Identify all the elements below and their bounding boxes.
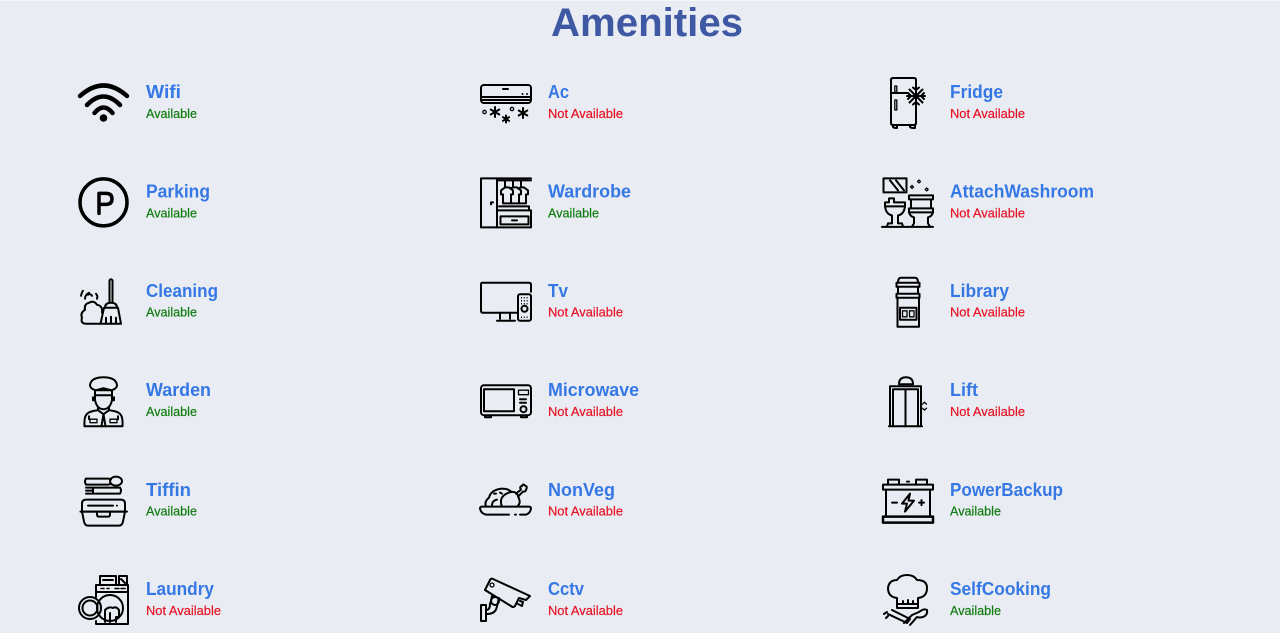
status: Not Available xyxy=(950,205,1025,220)
status: Not Available xyxy=(548,503,623,518)
name: PowerBackup xyxy=(950,480,1063,500)
name: Ac xyxy=(548,82,569,102)
amenity: Cctv xyxy=(481,579,623,621)
icon: microwave xyxy=(481,385,531,417)
name: Cleaning xyxy=(146,281,218,301)
icon: water dispenser xyxy=(896,278,920,327)
amenity: Wifi xyxy=(80,82,197,122)
amenity: Ac xyxy=(481,82,623,122)
icon: chef hat and utensils xyxy=(884,575,927,625)
status: Available xyxy=(146,205,197,220)
amenity: Library xyxy=(896,278,1025,327)
name: Laundry xyxy=(146,579,214,599)
amenity: Tv xyxy=(481,281,623,321)
amenity: Tiffin xyxy=(80,477,197,526)
icon: wardrobe xyxy=(481,178,531,227)
icon: warden officer xyxy=(84,377,123,426)
name: Lift xyxy=(950,380,978,400)
status: Not Available xyxy=(548,106,623,121)
name: Wardrobe xyxy=(548,182,631,202)
name: Wifi xyxy=(146,82,181,102)
amenity: PowerBackup xyxy=(883,480,1063,523)
status: Not Available xyxy=(950,106,1025,121)
icon: battery xyxy=(883,480,933,523)
icon: elevator xyxy=(889,377,926,426)
amenity: Laundry xyxy=(79,576,221,624)
status: Not Available xyxy=(548,603,623,618)
name: Tiffin xyxy=(146,480,191,500)
name: AttachWashroom xyxy=(950,182,1094,202)
icon: parking xyxy=(80,179,127,226)
title: Amenities xyxy=(551,1,743,45)
status: Available xyxy=(146,503,197,518)
icon: tv and remote xyxy=(481,283,531,321)
name: Parking xyxy=(146,182,210,202)
icon: roast chicken xyxy=(480,484,531,515)
name: Library xyxy=(950,281,1009,301)
amenity: NonVeg xyxy=(480,480,623,518)
status: Available xyxy=(950,603,1001,618)
icon: wifi xyxy=(80,86,127,122)
amenity: AttachWashroom xyxy=(882,178,1094,227)
status: Available xyxy=(950,503,1001,518)
name: Cctv xyxy=(548,579,584,599)
icon: tiffin box xyxy=(80,477,127,526)
status: Not Available xyxy=(950,305,1025,320)
icon: washroom xyxy=(882,178,933,227)
icon: washing machine xyxy=(79,576,128,624)
amenity: Lift xyxy=(889,377,1025,426)
amenity: Microwave xyxy=(481,380,639,419)
status: Not Available xyxy=(548,305,623,320)
amenity: SelfCooking xyxy=(884,575,1051,625)
status: Available xyxy=(548,205,599,220)
amenity: Warden xyxy=(84,377,211,426)
icon: fridge and snowflake xyxy=(891,78,925,128)
status: Not Available xyxy=(950,404,1025,419)
name: Fridge xyxy=(950,82,1003,102)
name: SelfCooking xyxy=(950,579,1051,599)
name: NonVeg xyxy=(548,480,615,500)
name: Tv xyxy=(548,281,568,301)
name: Warden xyxy=(146,380,211,400)
amenity: Parking xyxy=(80,179,210,226)
amenity: Cleaning xyxy=(81,279,218,324)
status: Not Available xyxy=(548,404,623,419)
amenity: Fridge xyxy=(891,78,1025,128)
status: Not Available xyxy=(146,603,221,618)
icon: broom and dust xyxy=(81,279,121,324)
name: Microwave xyxy=(548,380,639,400)
amenity: Wardrobe xyxy=(481,178,631,227)
icon: air conditioner with snow xyxy=(481,85,531,122)
status: Available xyxy=(146,106,197,121)
icon: cctv camera xyxy=(481,579,530,621)
status: Available xyxy=(146,404,197,419)
status: Available xyxy=(146,305,197,320)
